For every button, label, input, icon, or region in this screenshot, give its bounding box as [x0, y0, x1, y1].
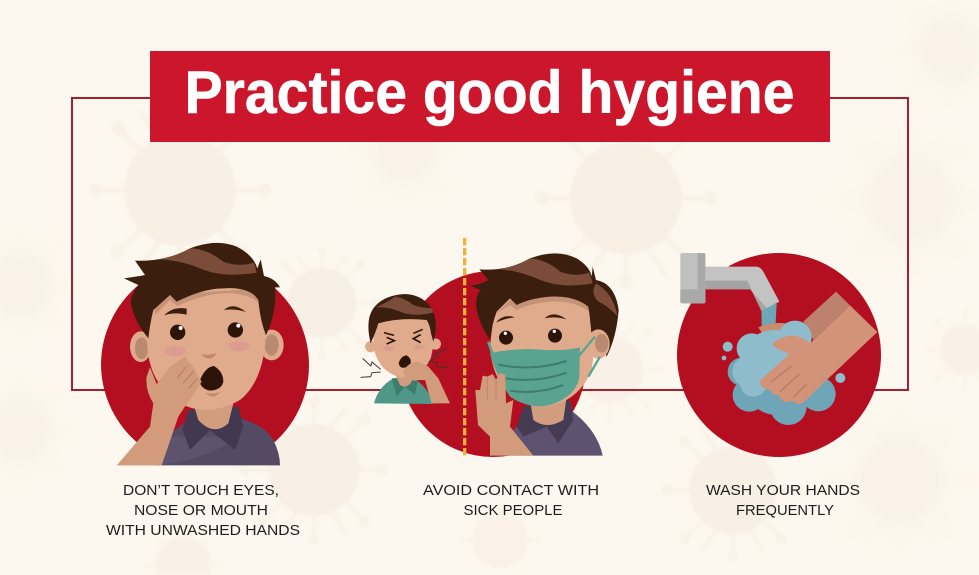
hair shadow	[497, 293, 589, 313]
cough lines	[361, 348, 448, 377]
mouth	[399, 355, 411, 368]
eyebrows	[496, 316, 515, 323]
mask	[490, 347, 580, 406]
panel: don't touch face	[101, 243, 309, 539]
raised hand and arm	[475, 373, 533, 456]
forearm shadow	[803, 292, 850, 340]
red circle 2	[400, 271, 586, 457]
hand and arm	[117, 357, 202, 465]
ears	[365, 341, 376, 352]
neck	[193, 403, 233, 429]
collar	[517, 400, 573, 443]
face	[147, 270, 266, 410]
mouth	[199, 366, 223, 391]
cheeks	[164, 346, 186, 356]
faucet pipe	[703, 267, 779, 311]
eyes	[499, 331, 513, 345]
small coughing man	[361, 294, 450, 404]
hair	[470, 253, 619, 357]
title banner	[150, 51, 830, 142]
face	[490, 277, 597, 407]
eyes	[170, 325, 185, 340]
bubbles	[723, 342, 733, 352]
caption 2: SICK PEOPLE	[464, 502, 562, 519]
face	[373, 318, 433, 377]
shirt	[155, 417, 280, 465]
closed eyes	[387, 335, 421, 344]
faucet flange	[680, 253, 705, 303]
eyebrows	[164, 308, 187, 315]
shirt	[374, 378, 433, 404]
front hand and arm	[760, 305, 877, 404]
caption 1: NOSE OR MOUTH	[134, 502, 268, 519]
soap foam front	[732, 321, 825, 397]
hair	[124, 243, 280, 338]
dashed divider	[460, 238, 470, 457]
back hand	[758, 323, 803, 340]
hair highlight	[158, 248, 257, 275]
title: Practice good hygiene	[184, 59, 794, 126]
hair shadow	[153, 288, 262, 315]
water stream	[761, 303, 777, 335]
neck	[393, 370, 413, 387]
fist and arm	[403, 362, 450, 403]
hair	[368, 294, 436, 343]
caption 3: FREQUENTLY	[736, 502, 834, 519]
caption 2: AVOID CONTACT WITH	[423, 482, 599, 499]
outline frame	[72, 98, 908, 390]
caption 1: DON’T TOUCH EYES,	[123, 482, 279, 499]
cheeks	[383, 346, 394, 351]
ear	[587, 329, 610, 359]
red circle 1	[101, 261, 309, 452]
red circle 3	[677, 253, 881, 457]
collar	[182, 407, 243, 450]
panel: wash hands	[677, 253, 881, 519]
caption 3: WASH YOUR HANDS	[706, 482, 860, 499]
nose	[202, 353, 217, 359]
ears	[130, 331, 151, 362]
shirt	[490, 405, 603, 456]
characters	[361, 238, 619, 457]
character: surprised man touching mouth	[117, 243, 284, 465]
neck	[530, 397, 567, 425]
hair highlights	[500, 258, 593, 285]
big masked man	[470, 253, 619, 456]
soap foam back	[728, 352, 836, 425]
panel: avoid contact	[361, 238, 619, 519]
mask straps	[578, 337, 600, 377]
caption 1: WITH UNWASHED HANDS	[106, 522, 300, 539]
